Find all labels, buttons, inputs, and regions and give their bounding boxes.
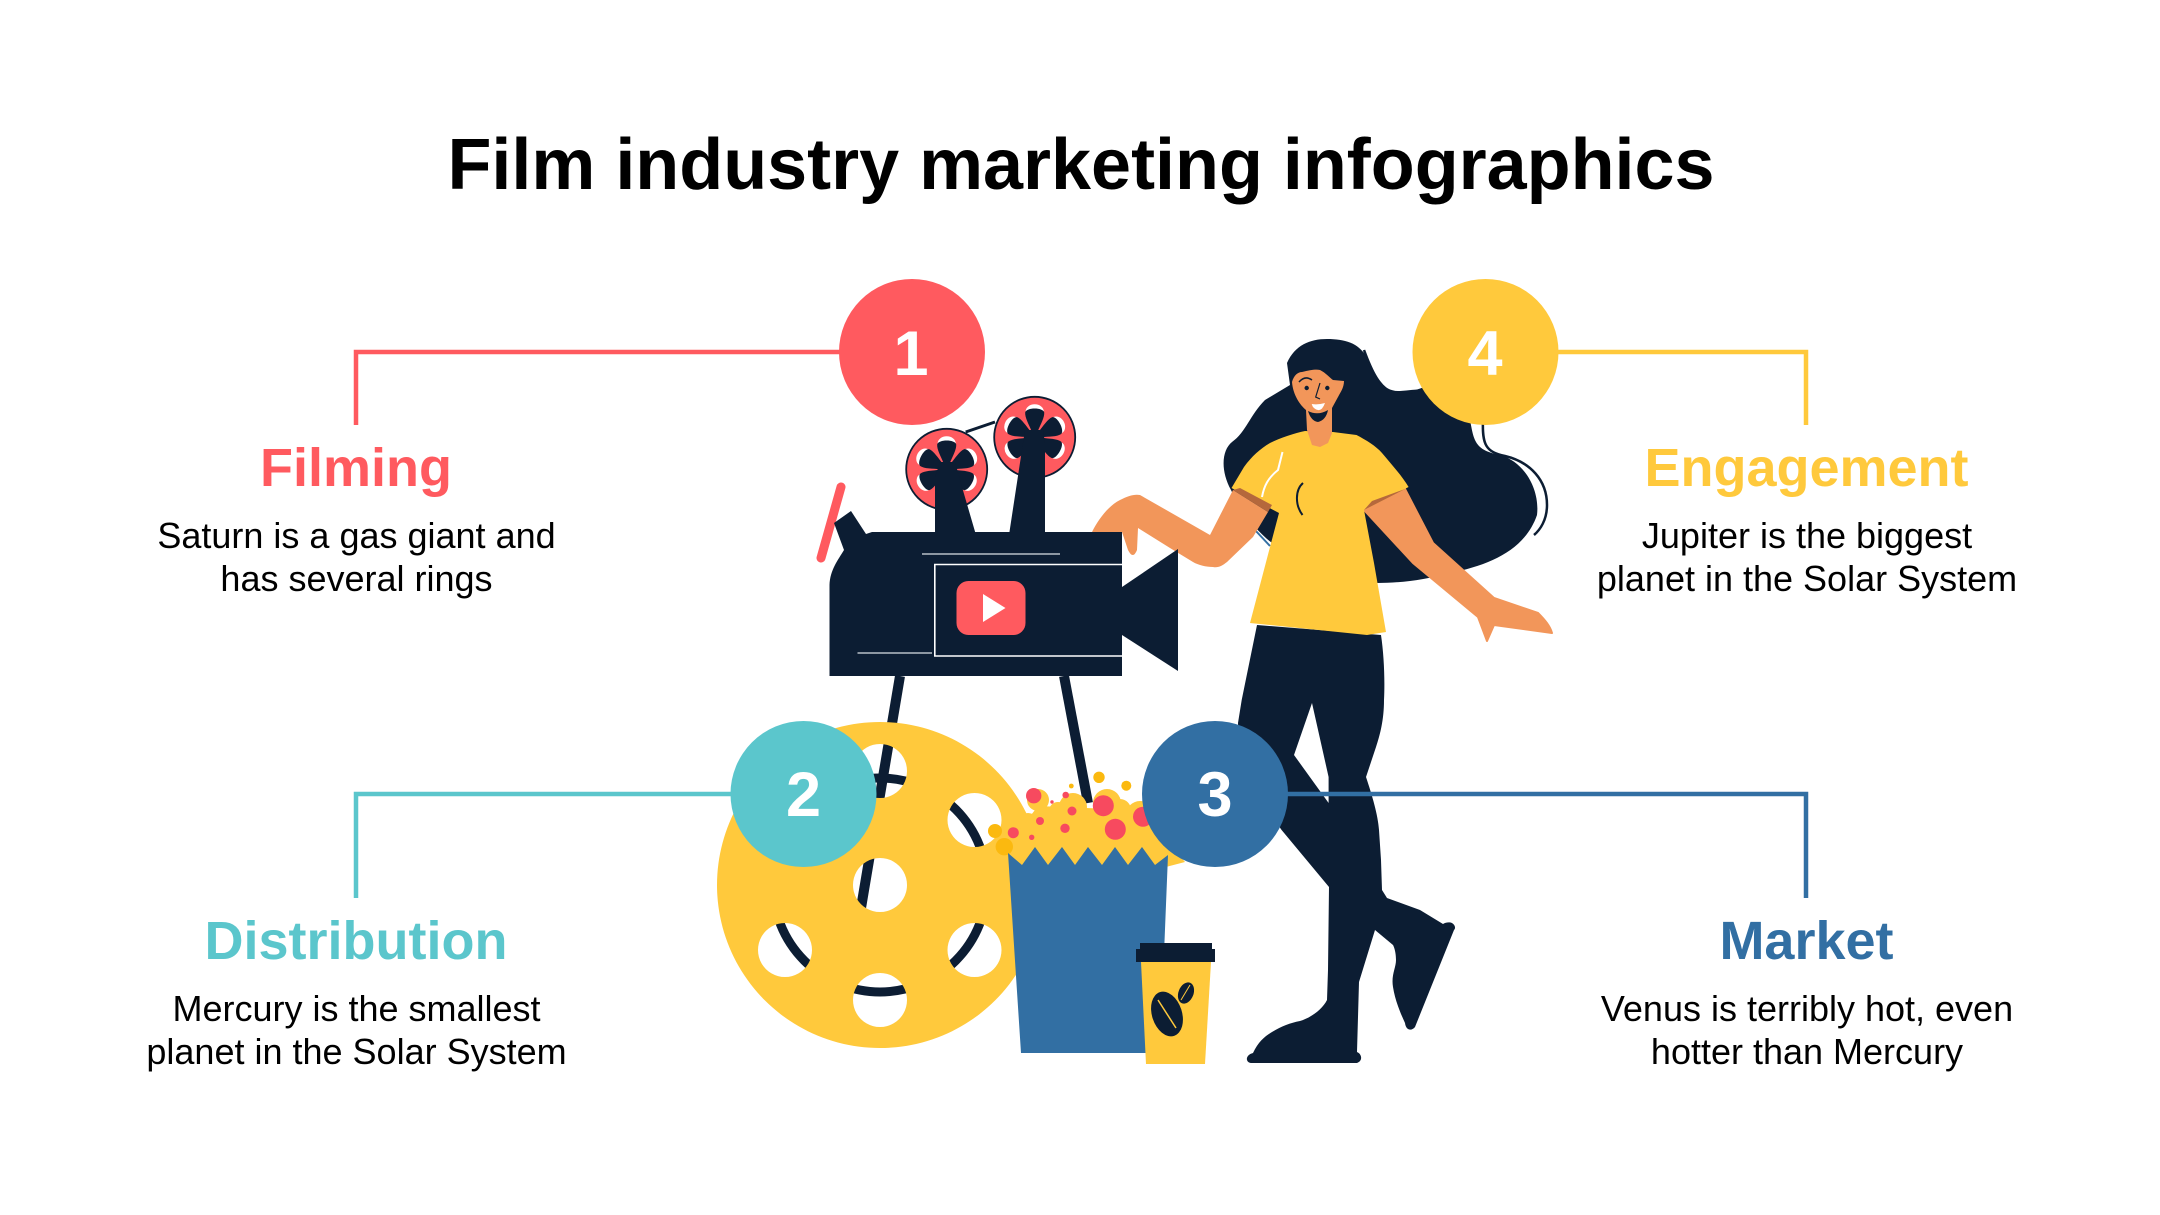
connector 2 xyxy=(356,794,803,898)
shirt highlight and fold xyxy=(1262,452,1282,497)
text block: Distribution xyxy=(146,911,567,1072)
text block: Market: Venus is terribly hot, even xyxy=(1601,988,2013,1029)
reel right xyxy=(994,397,1075,478)
text block: Engagement xyxy=(1597,438,2017,599)
shirt xyxy=(1232,431,1409,635)
text block: Distribution: Distribution xyxy=(205,911,507,971)
connector 3 xyxy=(1215,794,1806,898)
reel left xyxy=(906,429,987,510)
text block: Filming: Saturn is a gas giant and xyxy=(157,515,556,556)
text block: Engagement: planet in the Solar System xyxy=(1597,558,2017,599)
text block: Market xyxy=(1601,911,2013,1072)
face and neck xyxy=(1292,370,1344,447)
red accent stroke xyxy=(821,487,841,558)
text block: Filming: has several rings xyxy=(220,558,493,599)
number circle 3: 3 xyxy=(1197,760,1233,830)
illustration: woman xyxy=(1092,339,1552,1063)
play button xyxy=(956,581,1026,635)
hair xyxy=(1224,339,1537,583)
number circle 2 xyxy=(730,721,876,867)
illustration: popcorn bucket xyxy=(988,772,1185,1053)
gap between legs xyxy=(1294,703,1329,803)
number circle 2: 2 xyxy=(786,760,821,830)
belt between reels xyxy=(966,422,995,432)
left arm and hand xyxy=(1092,490,1268,567)
number circle 4: 4 xyxy=(1467,319,1503,389)
camera lens xyxy=(1122,549,1178,671)
illustration: film camera xyxy=(821,397,1178,676)
text block: Engagement: Engagement xyxy=(1644,438,1969,498)
title: Film industry marketing infographics xyxy=(447,125,1715,205)
illustration: coffee cup xyxy=(1136,943,1215,1064)
legs xyxy=(1238,625,1455,1063)
right arm and hand xyxy=(1364,489,1552,641)
text block: Distribution: planet in the Solar System xyxy=(146,1031,567,1072)
connector 1 xyxy=(356,352,912,425)
facial features xyxy=(1299,378,1330,410)
illustration: film reel with tripod legs behind xyxy=(717,676,1088,1048)
text block: Market: hotter than Mercury xyxy=(1651,1031,1963,1072)
number circle 1: 1 xyxy=(893,319,929,389)
number circle 3 xyxy=(1142,721,1288,867)
text block: Market: Market xyxy=(1719,911,1894,971)
screen frame xyxy=(935,564,1122,656)
text block: Distribution: Mercury is the smallest xyxy=(172,988,541,1029)
sleeve shadows xyxy=(1233,488,1405,512)
text block: Filming xyxy=(157,438,556,599)
camera body xyxy=(830,430,1122,676)
text block: Engagement: Jupiter is the biggest xyxy=(1642,515,1972,556)
chin shadow xyxy=(1308,410,1328,422)
number circle 4 xyxy=(1412,279,1558,425)
text block: Filming: Filming xyxy=(260,438,452,498)
connector 4 xyxy=(1486,352,1806,425)
number circle 1 xyxy=(839,279,985,425)
